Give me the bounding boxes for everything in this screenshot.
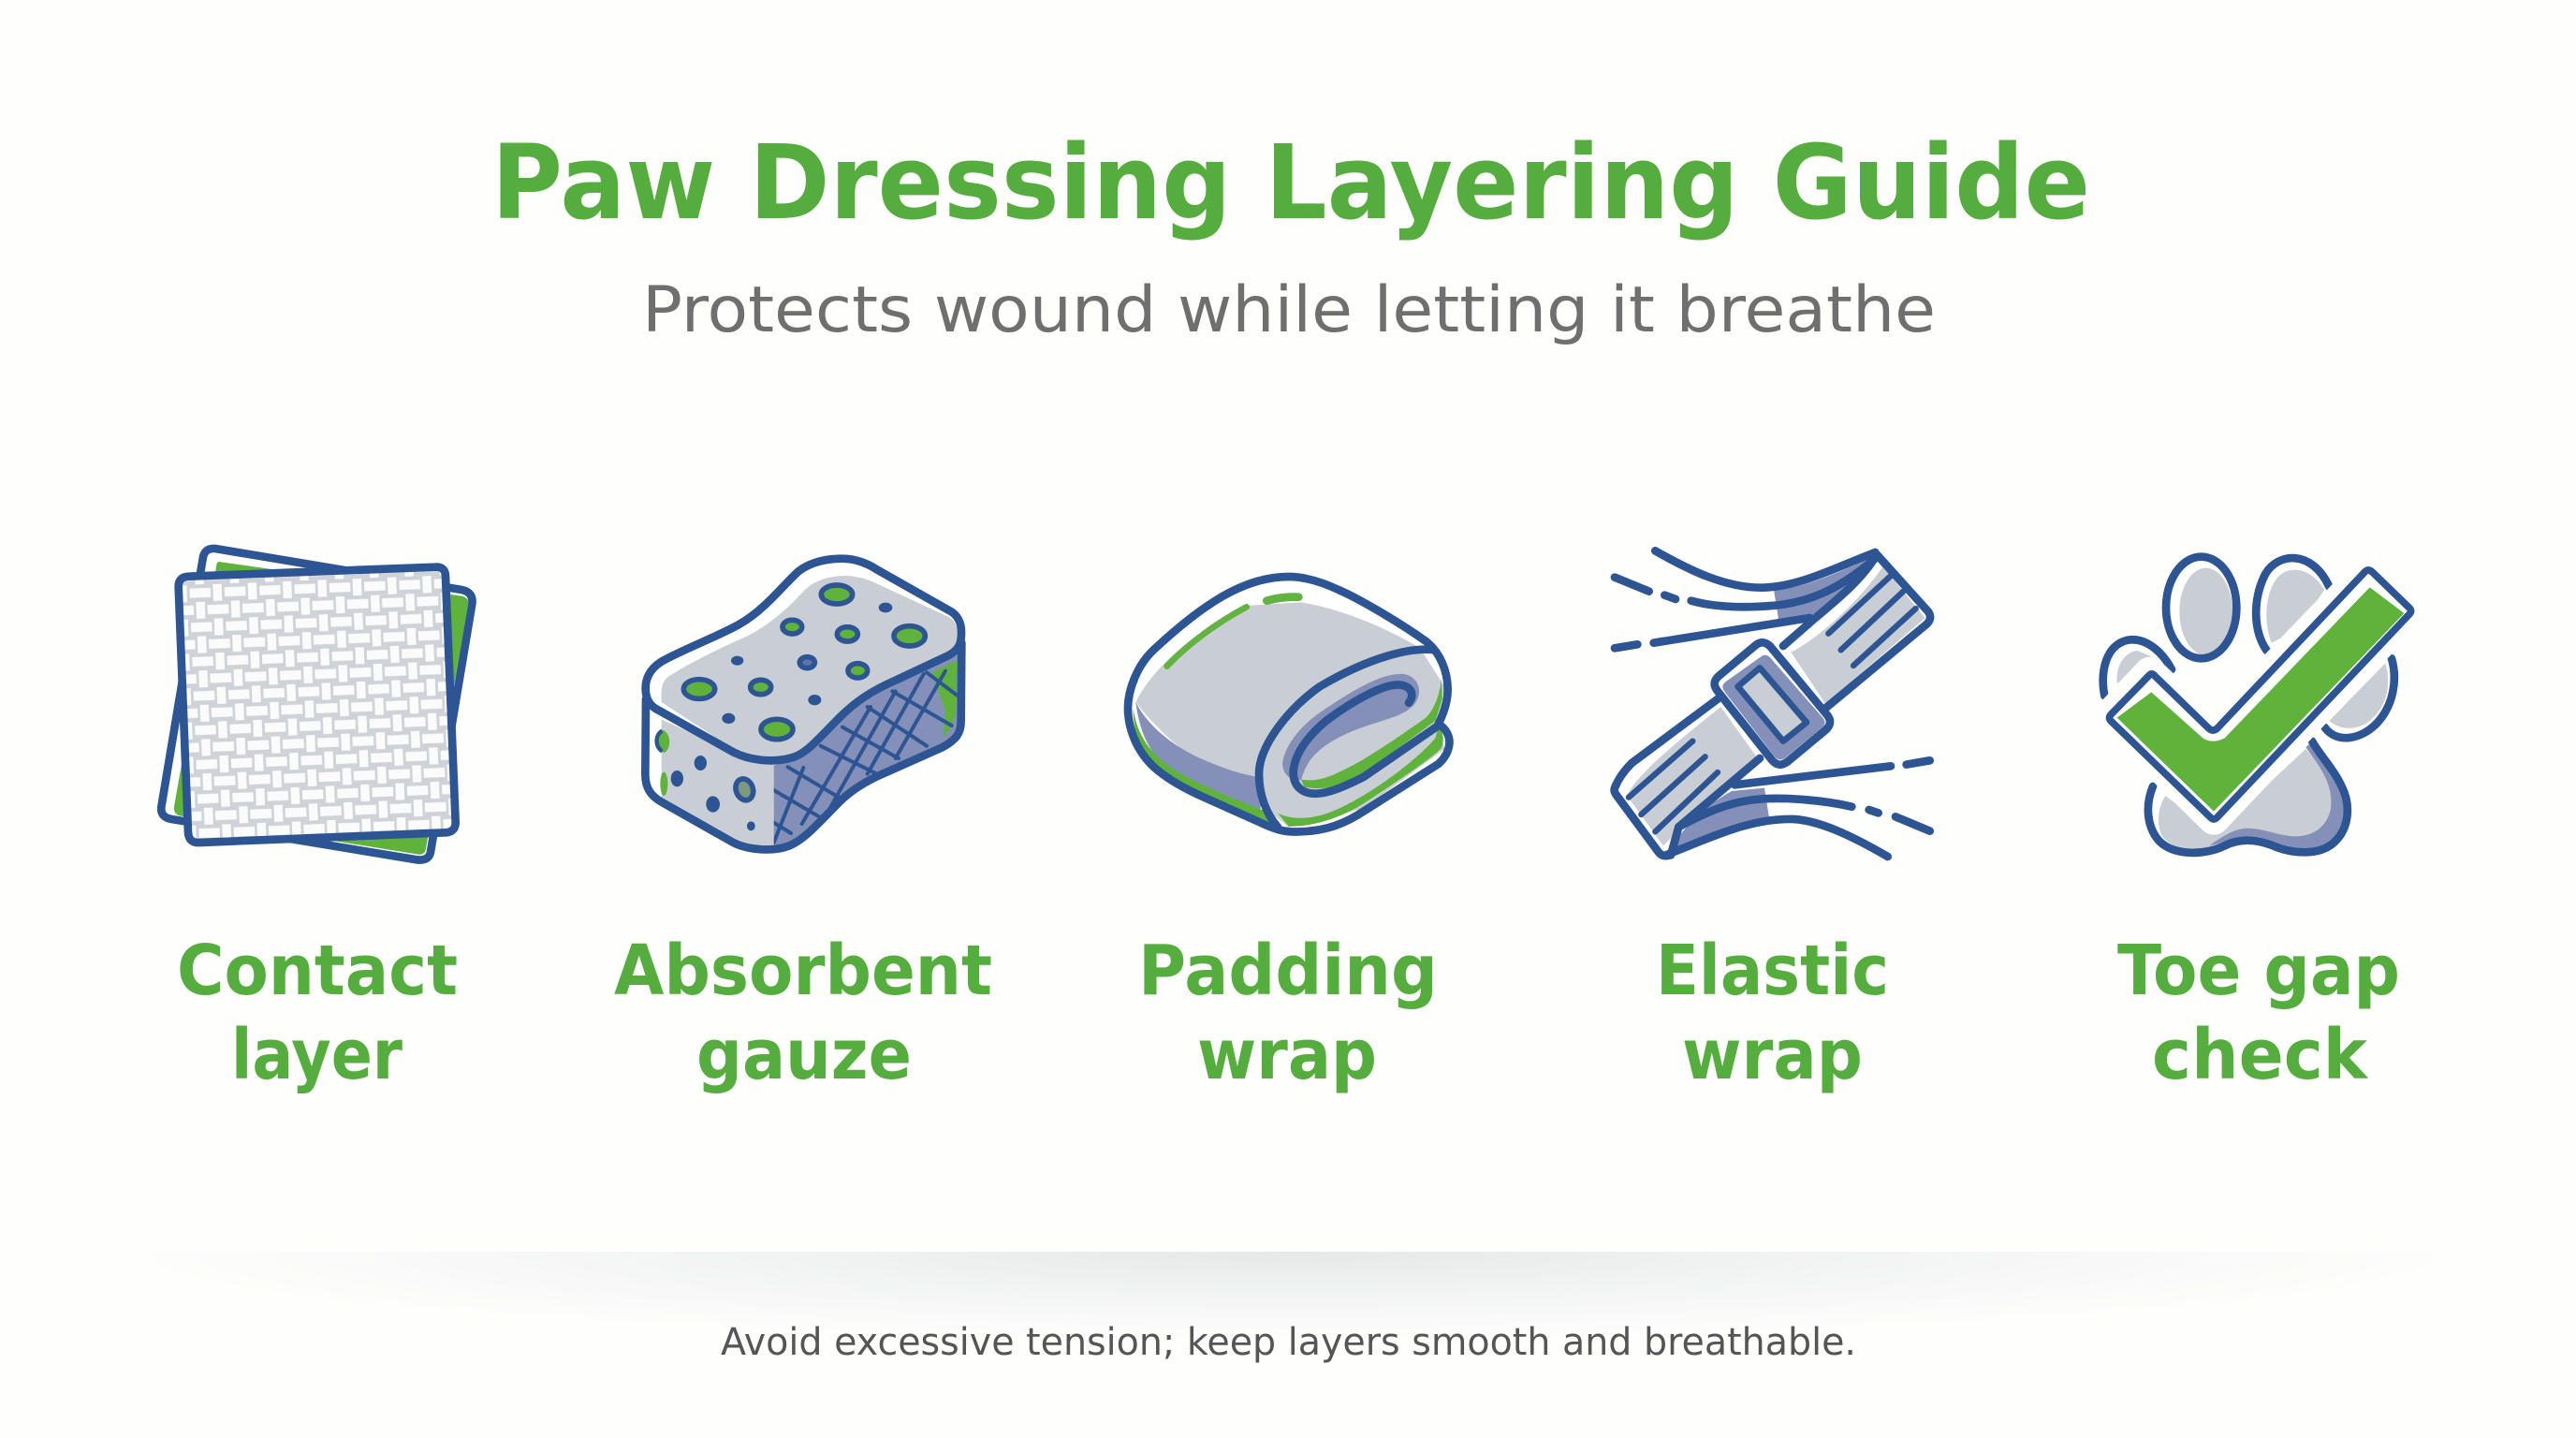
label: Contact layer: layer [231, 1015, 402, 1095]
label: Padding wrap: Padding [1138, 931, 1438, 1011]
label: Elastic wrap: Elastic [1656, 931, 1889, 1011]
label: Elastic wrap: wrap [1682, 1015, 1863, 1095]
label: Padding wrap: wrap [1197, 1015, 1377, 1095]
icon: contact layer sheets [161, 549, 473, 860]
label: Elastic wrap [1656, 931, 1889, 1095]
label: Toe gap check: Toe gap [2117, 931, 2400, 1011]
subtitle: Protects wound while letting it breathe [642, 273, 1936, 347]
label: Absorbent gauze: Absorbent [614, 931, 992, 1011]
label: Absorbent gauze [614, 931, 992, 1095]
icon: padding wrap roll [1128, 577, 1449, 832]
label: Padding wrap [1138, 931, 1438, 1095]
label: Toe gap check [2117, 931, 2400, 1095]
icon: absorbent gauze sponge [645, 559, 961, 849]
label: Contact layer: Contact [177, 931, 458, 1011]
icon: elastic wrap bandage [1615, 550, 1930, 857]
label: Toe gap check: check [2152, 1015, 2369, 1095]
label: Contact layer [177, 931, 458, 1095]
icon: paw with check mark [2103, 557, 2412, 853]
title: Paw Dressing Layering Guide [491, 123, 2090, 242]
footer shadow band [112, 1252, 2471, 1430]
label: Absorbent gauze: gauze [696, 1015, 912, 1095]
footer note: Avoid excessive tension; keep layers smooth and breathable. [721, 1321, 1856, 1364]
